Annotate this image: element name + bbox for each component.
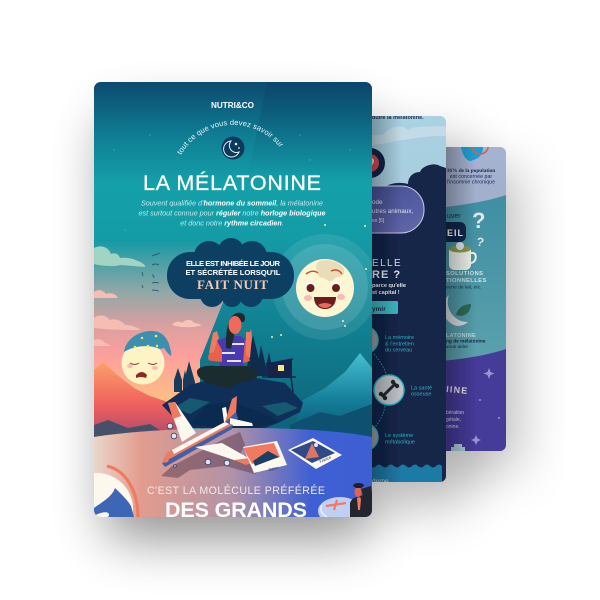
postcard paris — [288, 438, 342, 469]
text: insomnia statistic: 16% de la population — [447, 168, 495, 174]
panel: back card: verre de lait, etc. — [446, 284, 481, 290]
text: benefits — [385, 335, 432, 446]
intro text: est surtout connue pour réguler notre horloge biologique — [139, 208, 325, 218]
intro text: et donc notre rythme circadien. — [180, 218, 284, 228]
cloud left — [94, 246, 145, 267]
text: solutions: SOLUTIONS — [446, 271, 483, 277]
icon: moon and leaf — [446, 295, 471, 326]
text: insomnia statistic: l'insomnie chronique — [447, 180, 495, 186]
heading: pourquoi est-elle: RE ? — [372, 269, 401, 281]
engines — [167, 423, 230, 467]
shadow — [105, 115, 520, 540]
icon: sparkles — [471, 368, 500, 445]
near wing — [195, 443, 252, 464]
text: benefits: osseuse — [411, 392, 432, 398]
fuselage — [162, 422, 233, 467]
postcard paris: France — [319, 454, 333, 464]
wave band — [372, 464, 442, 482]
icon: tea cup — [449, 242, 476, 270]
sleeping moon — [122, 331, 171, 384]
icon: bottle top — [451, 444, 465, 451]
text: libération: onine. — [446, 424, 460, 430]
pill: callout: es [5] — [372, 218, 385, 224]
mountains left — [94, 362, 190, 440]
text: benefits: métabolique — [385, 440, 415, 446]
intro text: Souvent qualifiée d'hormone du sommeil, la mélatonine — [141, 198, 323, 208]
panel: front card: DES GRANDS — [165, 498, 307, 522]
text: mélatonine: vous aider — [446, 344, 469, 350]
text: libération: bération — [446, 410, 464, 416]
cloud sky — [94, 290, 141, 346]
text: benefits: Le système — [385, 433, 413, 439]
icon: bone circle — [374, 375, 404, 405]
text: trouver: uver — [447, 213, 461, 220]
speech cloud: ELLE EST INHIBÉE LE JOUR — [186, 259, 280, 268]
ground — [94, 428, 372, 517]
text: libération: gétale, — [446, 417, 461, 423]
text: libération — [446, 410, 464, 428]
cloud navy — [372, 164, 446, 482]
heading: pourquoi est-elle: parce qu'elle — [372, 283, 406, 289]
icon: moon badge — [222, 136, 244, 160]
speech cloud: FAIT NUIT — [197, 277, 268, 292]
panel: middle card — [372, 116, 446, 482]
text: benefits: La santé — [411, 386, 432, 392]
text: produire la mélatonine: duire la mélatonine. — [372, 115, 424, 121]
text: benefits: & l'entretien — [385, 342, 414, 348]
speech cloud — [167, 238, 294, 307]
panel: front card — [94, 82, 372, 517]
bottom headline: C'EST LA MOLÉCULE PRÉFÉRÉE — [147, 484, 325, 497]
text: benefits: du cerveau — [385, 348, 412, 354]
postcard japan: Japon — [266, 465, 280, 472]
birds — [142, 253, 160, 291]
heading: pourquoi est-elle: ELLE — [372, 258, 402, 269]
text: insomnia statistic: est concernée par — [450, 174, 492, 180]
panel: back card — [446, 147, 506, 451]
intro text — [139, 198, 325, 228]
icon: brain circle — [372, 328, 379, 352]
postcard japan — [243, 441, 287, 473]
plane shadow — [161, 432, 262, 478]
button — [372, 301, 398, 314]
plane — [162, 396, 258, 467]
stars — [271, 224, 367, 338]
pilot — [350, 483, 372, 517]
icon: metabolic circle — [372, 424, 379, 450]
icon: question marks: ? — [475, 235, 485, 250]
woman meditating — [197, 313, 258, 388]
pill: callout: utres animaux, — [372, 208, 414, 215]
pill: callout: ode — [372, 199, 383, 206]
text: solutions — [446, 271, 486, 282]
icon: question marks — [473, 212, 484, 246]
label: sommeil pill: EIL — [447, 228, 464, 238]
title: LA MÉLATONINE — [143, 170, 322, 195]
heading: pourquoi est-elle: st capital ! — [372, 290, 400, 296]
pill: callout — [372, 186, 424, 234]
arc text: tout ce que vous devez savoir sur — [177, 120, 283, 154]
text: mélatonine — [446, 333, 486, 348]
far wing — [168, 402, 196, 442]
label: sommeil pill — [446, 222, 466, 242]
mountains right — [290, 353, 372, 440]
text: derne: derne — [372, 478, 389, 485]
moon halo — [272, 234, 378, 340]
cabin — [262, 359, 296, 392]
heading: pourquoi est-elle — [372, 258, 406, 296]
small globe with plane — [318, 497, 362, 525]
heading: -ine: IINE — [446, 384, 469, 396]
globe — [61, 466, 138, 545]
icon: blue hourglass with red ring — [461, 147, 488, 161]
logo: NUTRI&CO — [211, 101, 254, 110]
hill — [162, 377, 303, 428]
text: insomnia statistic — [447, 168, 495, 186]
dotted link — [374, 354, 386, 428]
forest trees — [174, 335, 274, 395]
text: solutions: TIONNELLES — [446, 278, 487, 284]
tail — [222, 407, 228, 422]
text: mélatonine: LATONINE — [446, 333, 476, 339]
text: benefits: La mémoire — [385, 335, 414, 341]
icon: question marks: ? — [472, 208, 485, 233]
speech cloud: ET SÉCRÉTÉE LORSQU'IL — [186, 268, 281, 277]
button: ymir — [372, 306, 386, 313]
icon: heart circle — [372, 148, 385, 178]
moon awake — [296, 259, 354, 317]
text: mélatonine: ng de mélatonine — [446, 338, 486, 344]
